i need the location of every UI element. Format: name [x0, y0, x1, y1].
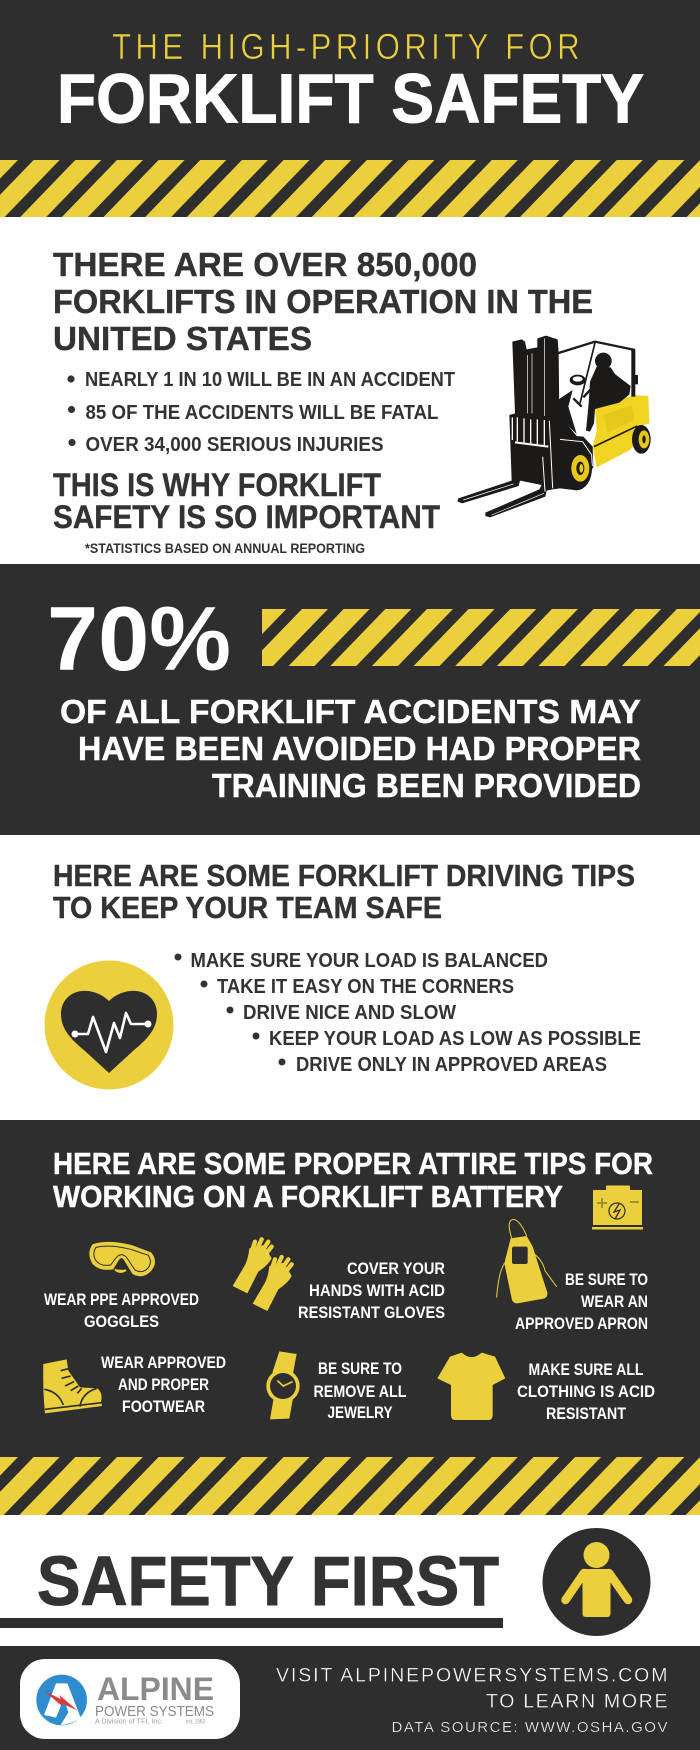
text: clothing: MAKE SURE ALL [528, 1360, 644, 1379]
subheading: why safety is important: THIS IS WHY FORKLIFT [53, 467, 381, 503]
title: forklift safety: FORKLIFT SAFETY [57, 60, 644, 138]
heading: 850,000 forklifts: UNITED STATES [53, 321, 312, 358]
text: gloves [298, 1259, 445, 1322]
call to action: VISIT ALPINEPOWERSYSTEMS.COM [276, 1664, 668, 1686]
bullet list: driving tips [174, 950, 641, 1076]
subheading: why safety is important [53, 467, 440, 535]
text: apron: BE SURE TO [565, 1270, 648, 1289]
icon: boot [43, 1359, 102, 1413]
text: clothing: CLOTHING IS ACID [517, 1382, 655, 1401]
text: gloves: COVER YOUR [347, 1259, 445, 1278]
icon: person in circle [542, 1528, 650, 1636]
heading: driving tips [53, 858, 635, 925]
bullet list: driving tips: MAKE SURE YOUR LOAD IS BALANCED [190, 950, 548, 972]
panel: safety first [0, 1528, 650, 1636]
bullet list: driving tips: DRIVE NICE AND SLOW [243, 1002, 456, 1024]
bullet list: driving tips: TAKE IT EASY ON THE CORNERS [217, 976, 514, 998]
panel: header [0, 0, 700, 217]
footnote: *STATISTICS BASED ON ANNUAL REPORTING [85, 540, 365, 556]
text: apron: APPROVED APRON [515, 1314, 648, 1333]
data source: DATA SOURCE: WWW.OSHA.GOV [392, 1719, 668, 1736]
icon: apron [497, 1219, 557, 1303]
heading: 850,000 forklifts: THERE ARE OVER 850,000 [53, 247, 477, 284]
icon: forklift [457, 336, 651, 517]
text: jewelry: BE SURE TO [318, 1359, 402, 1378]
text: gloves: RESISTANT GLOVES [298, 1303, 445, 1322]
statement: accidents avoided: HAVE BEEN AVOIDED HAD PROPER [78, 731, 641, 768]
statement: accidents avoided: TRAINING BEEN PROVIDED [212, 768, 641, 805]
text: goggles [44, 1290, 199, 1331]
panel: driving tips [44, 858, 641, 1090]
icon: heart with pulse [44, 960, 174, 1090]
icon: battery [592, 1186, 643, 1230]
underline bar [0, 1618, 503, 1628]
icon: gloves [233, 1239, 292, 1311]
statement: accidents avoided [60, 694, 641, 805]
panel: attire tips [0, 1120, 700, 1515]
text: jewelry: JEWELRY [328, 1403, 393, 1422]
text: goggles: GOGGLES [84, 1312, 159, 1331]
text: footwear: WEAR APPROVED [101, 1353, 226, 1372]
logo: alpine power systems [20, 1659, 240, 1739]
panel: footer [0, 1646, 700, 1750]
big number: 70%: 70% [47, 589, 231, 690]
text: gloves: HANDS WITH ACID [309, 1281, 445, 1300]
heading: 850,000 forklifts [53, 247, 593, 358]
heading: attire tips: WORKING ON A FORKLIFT BATTERY [53, 1179, 563, 1214]
hazard stripe band: top [0, 160, 700, 217]
bullet list: accident statistics: 85 OF THE ACCIDENTS WILL BE FATAL [86, 402, 438, 424]
icon: t-shirt [437, 1353, 505, 1420]
logo division line: A Division of TFI, Inc. [95, 1716, 163, 1726]
call to action [276, 1664, 668, 1712]
hazard stripe band: bottom [0, 1457, 700, 1515]
text: clothing [517, 1360, 655, 1423]
bullet list: driving tips: DRIVE ONLY IN APPROVED AREAS [296, 1054, 607, 1076]
title: the high-priority for: THE HIGH-PRIORITY FOR [112, 26, 584, 67]
text: jewelry [314, 1359, 406, 1422]
text: clothing: RESISTANT [546, 1404, 627, 1423]
bullet list: accident statistics [67, 369, 455, 456]
text: footwear: FOOTWEAR [122, 1397, 205, 1416]
hazard stripe band: middle [262, 609, 700, 666]
logo globe [36, 1675, 87, 1725]
heading: 850,000 forklifts: FORKLIFTS IN OPERATION IN THE [53, 284, 593, 321]
text: apron [515, 1270, 648, 1333]
panel: forklift statistics [53, 247, 651, 556]
subheading: why safety is important: SAFETY IS SO IMPORTANT [53, 499, 440, 535]
heading: driving tips: TO KEEP YOUR TEAM SAFE [53, 890, 442, 925]
bullet list: driving tips: KEEP YOUR LOAD AS LOW AS POSSIBLE [269, 1028, 641, 1050]
icon: goggles [90, 1243, 154, 1275]
heading: safety first: SAFETY FIRST [37, 1542, 499, 1620]
statement: accidents avoided: OF ALL FORKLIFT ACCIDENTS MAY [60, 694, 641, 731]
text: footwear: AND PROPER [118, 1375, 209, 1394]
logo subtitle: POWER SYSTEMS [95, 1704, 214, 1720]
panel: 70 percent [0, 564, 700, 835]
icon: watch [266, 1351, 300, 1419]
logo established date: est. 1963 [186, 1720, 206, 1726]
bullet list: accident statistics: OVER 34,000 SERIOUS INJURIES [86, 434, 384, 456]
text: apron: WEAR AN [581, 1292, 648, 1311]
bullet list: accident statistics: NEARLY 1 IN 10 WILL BE IN AN ACCIDENT [85, 369, 455, 391]
text: footwear [101, 1353, 226, 1416]
logo wordmark: ALPINE [97, 1671, 214, 1707]
heading: driving tips: HERE ARE SOME FORKLIFT DRIVING TIPS [53, 858, 635, 893]
text: jewelry: REMOVE ALL [314, 1382, 406, 1401]
text: goggles: WEAR PPE APPROVED [44, 1290, 199, 1309]
call to action: TO LEARN MORE [486, 1690, 668, 1712]
heading: attire tips [53, 1146, 653, 1214]
